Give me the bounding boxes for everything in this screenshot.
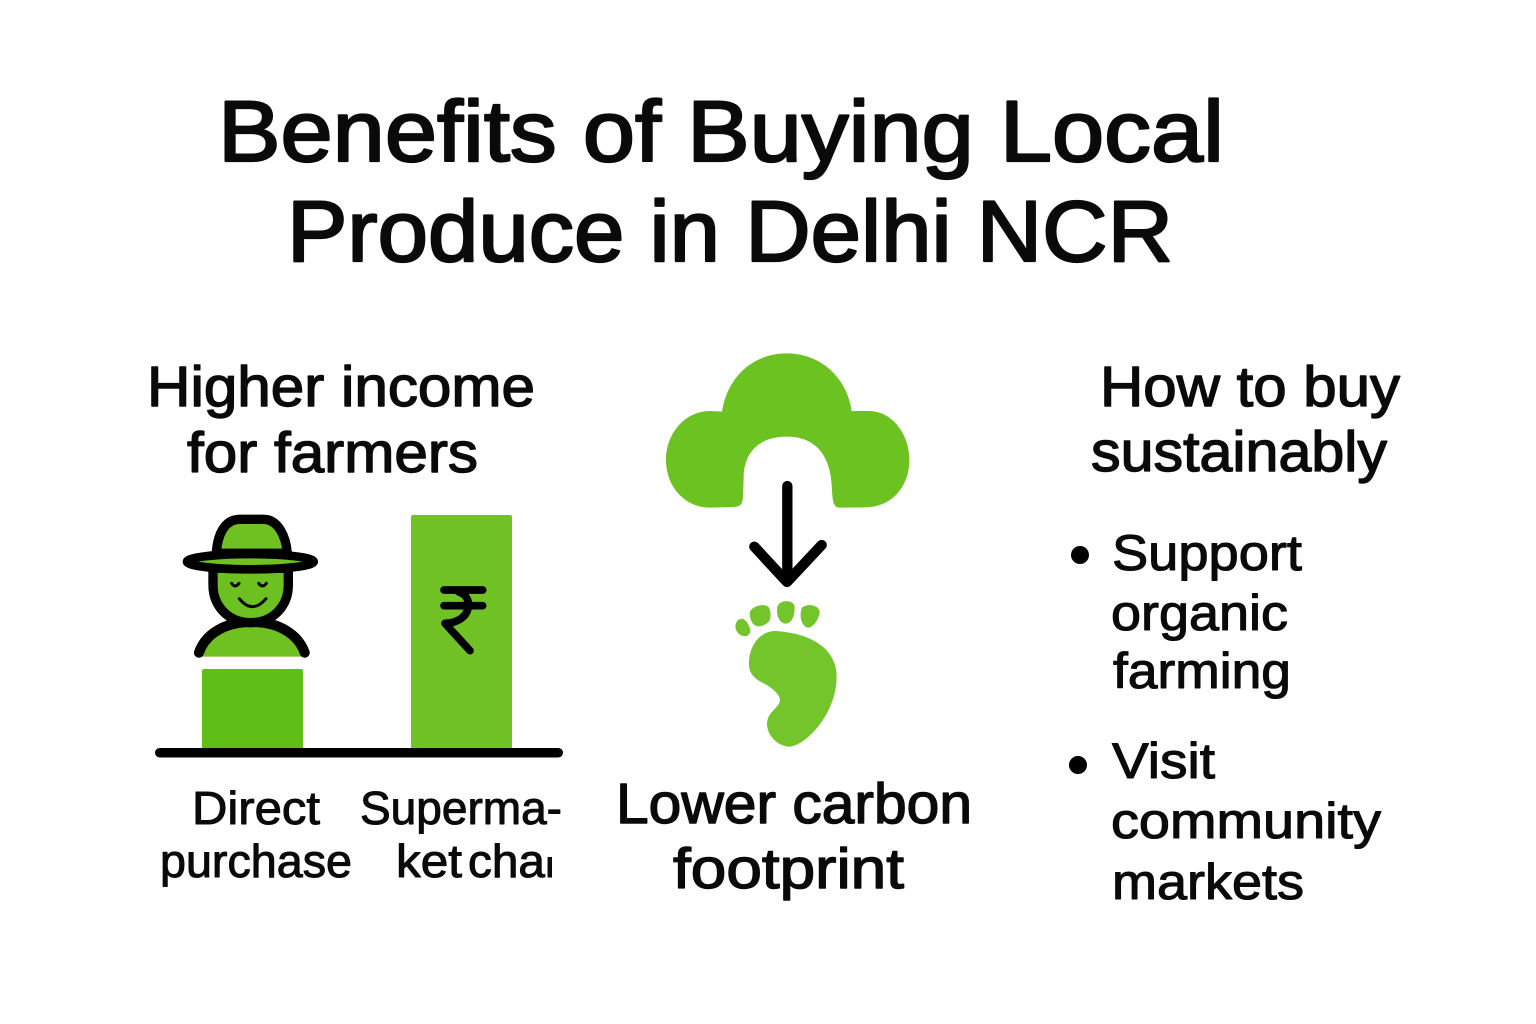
heading: higher income <box>147 355 535 485</box>
icon: rupee symbol <box>444 590 483 651</box>
heading: lower carbon footprint: footprint <box>673 837 904 901</box>
label: supermarket chain: chain <box>468 835 582 887</box>
heading: how to buy sustainably <box>1091 355 1401 484</box>
icon: farmer <box>187 519 314 657</box>
panel: lower carbon footprint <box>616 353 972 901</box>
bar: supermarket chain <box>411 515 512 749</box>
heading: higher income: for farmers <box>187 421 478 485</box>
heading: lower carbon footprint: Lower carbon <box>616 772 972 836</box>
title: Benefits of Buying Local <box>218 84 1224 180</box>
panel: higher income for farmers <box>147 355 582 887</box>
label: supermarket chain: Superma- <box>360 782 562 834</box>
label: supermarket chain <box>362 791 560 878</box>
icon: down arrow <box>754 486 822 582</box>
heading: lower carbon footprint <box>616 772 972 901</box>
bullet: support organic farming: organic <box>1111 585 1288 641</box>
bullet: visit community markets <box>1069 733 1381 910</box>
bullet: support organic farming: farming <box>1113 643 1291 699</box>
title <box>218 84 1224 280</box>
panel: how to buy sustainably <box>1069 355 1401 910</box>
bullet: support organic farming: Support <box>1112 525 1302 581</box>
heading: higher income: Higher income <box>147 355 535 419</box>
label: supermarket chain: ket <box>396 835 462 887</box>
label: direct purchase: Direct <box>192 782 320 834</box>
title: Produce in Delhi NCR <box>287 184 1173 280</box>
bullet: support organic farming <box>1071 525 1302 699</box>
heading: how to buy sustainably: How to buy <box>1100 355 1401 419</box>
chart baseline <box>155 748 563 758</box>
label: direct purchase <box>160 782 352 887</box>
icon: footprint <box>735 601 837 747</box>
bullet: visit community markets: markets <box>1112 854 1304 910</box>
bullet: visit community markets: community <box>1111 793 1381 849</box>
bullet: visit community markets: Visit <box>1112 733 1215 789</box>
heading: how to buy sustainably: sustainably <box>1091 420 1388 484</box>
label: direct purchase: purchase <box>160 835 352 887</box>
bar: direct purchase <box>202 669 303 749</box>
icon: cloud <box>666 353 909 508</box>
